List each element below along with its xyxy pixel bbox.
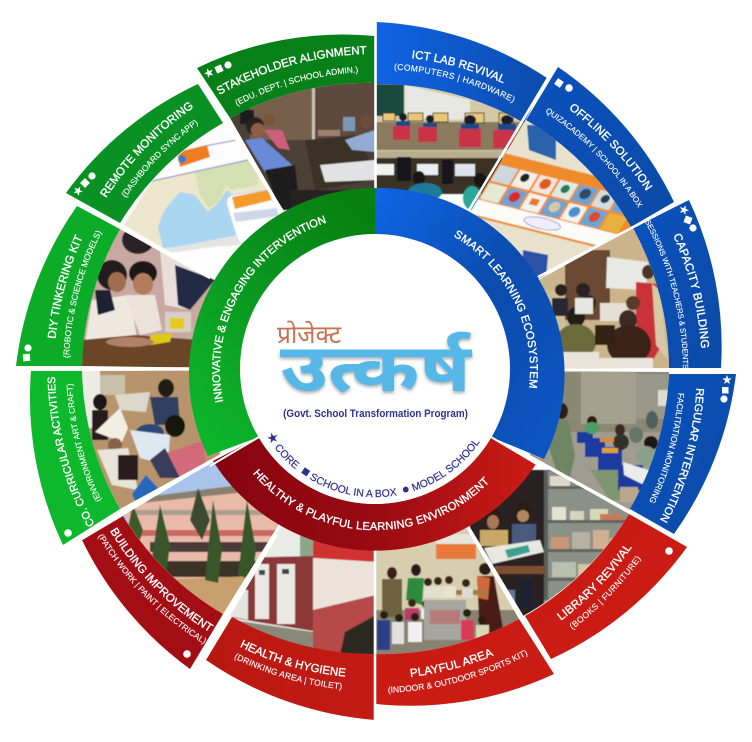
photo: group with sports kit	[376, 528, 519, 654]
title: STAKEHOLDER ALIGNMENT	[216, 46, 366, 94]
subtitle: (COMPUTERS | HARDWARE)	[394, 63, 514, 104]
logo: Project Utkarsh	[277, 321, 472, 420]
band	[630, 374, 736, 534]
subtitle: (DRINKING AREA | TOILET)	[234, 654, 342, 691]
icons: school in a box, model school	[23, 344, 32, 361]
icon: model school	[665, 547, 673, 555]
ring: Smart Learning Ecosystem	[375, 188, 565, 459]
band	[16, 206, 120, 366]
panel: Capacity Building	[539, 200, 722, 368]
band	[206, 617, 375, 720]
center: logo disc	[240, 234, 510, 504]
band	[30, 371, 120, 545]
band	[197, 34, 375, 118]
title: CO. CURRICULAR ACTIVITIES	[47, 377, 94, 526]
subtitle: (PATCH WORK | PAINT | ELECTRICAL)	[97, 534, 206, 645]
panel: Regular Intervention	[529, 371, 736, 534]
title: CAPACITY BUILDING	[674, 234, 710, 348]
subtitle: (DASHBOARD SYNC APP)	[122, 120, 198, 198]
icons: core, school in a box, model school	[71, 172, 96, 197]
band	[525, 514, 687, 659]
subtitle: SESSIONS WITH TEACHERS & STUDENTS	[645, 220, 688, 368]
photo: meeting	[225, 80, 380, 210]
band	[376, 619, 554, 706]
label: HEALTHY & PLAYFUL LEARNING ENVIRONMENT	[253, 468, 488, 530]
title: PLAYFUL AREA	[410, 649, 494, 678]
panel: Playful Area	[376, 528, 554, 706]
photo: toilets and drinking area	[230, 526, 374, 654]
logo word: utkarsh: उत्कर्ष	[280, 331, 472, 405]
panel: Building Improvement	[82, 440, 279, 669]
panel: Co. Curricular Activities	[30, 370, 221, 545]
legend: program types: ★ CORE ■ SCHOOL IN A BOX ● MODEL SCHOOL	[267, 432, 480, 498]
photo: children with paper craft	[82, 370, 221, 509]
panel: Remote Monitoring	[66, 84, 282, 253]
icon: model school	[64, 529, 72, 537]
photo: computer lab	[376, 84, 526, 210]
subtitle: (BOOKS | FURNITURE)	[570, 556, 642, 630]
subtitle: FACILITATION MONITORING	[650, 393, 684, 504]
icons: core, school in a box, model school	[203, 61, 232, 79]
ring: Innovative & Engaging Intervention	[188, 188, 375, 456]
band	[376, 22, 547, 123]
band	[633, 200, 722, 368]
photo: teacher session	[539, 228, 669, 368]
photo: poster	[472, 120, 631, 279]
photo: classroom	[530, 370, 675, 515]
band	[82, 516, 223, 669]
photo: dashboard map	[124, 139, 282, 253]
photo: children with kit	[82, 228, 214, 368]
logo tagline: (Govt. School Transformation Program)	[283, 407, 468, 420]
icons: core, school in a box, model school	[720, 375, 732, 403]
title: REGULAR INTERVENTION	[660, 388, 704, 524]
icons: school in a box, model school	[554, 78, 573, 92]
label: INNOVATIVE & ENGAGING INTERVENTION	[212, 215, 326, 403]
title: DIY TINKERING KIT	[48, 234, 82, 338]
logo word: project: प्रोजेक्ट	[277, 321, 342, 349]
subtitle: (EDU. DEPT. | SCHOOL ADMIN.)	[236, 66, 358, 106]
label: SMART LEARNING ECOSYSTEM	[454, 230, 538, 388]
subtitle: (INDOOR & OUTDOOR SPORTS KIT)	[388, 650, 528, 695]
title: OFFLINE SOLUTION	[570, 104, 653, 191]
band	[66, 84, 223, 223]
photo: school building	[123, 440, 279, 614]
title: ICT LAB REVIVAL	[412, 50, 504, 84]
title: LIBRARY REVIVAL	[556, 546, 632, 620]
photo: library shelves and students	[470, 470, 640, 620]
panel: Stakeholder Alignment	[197, 34, 374, 211]
title: HEALTH & HYGIENE	[240, 640, 346, 677]
panel: Library Revival	[469, 469, 687, 659]
panel: Health & Hygiene	[206, 526, 374, 720]
icons: core, school in a box, model school	[678, 204, 697, 232]
icon: model school	[183, 650, 191, 658]
title: REMOTE MONITORING	[100, 102, 193, 198]
subtitle: (ENVIRONMENT ART & CRAFT)	[66, 384, 102, 502]
ring: Healthy & Playful Learning Environment	[213, 438, 536, 551]
title: BUILDING IMPROVEMENT	[110, 527, 214, 631]
panel: DIY Tinkering Kit	[16, 206, 214, 368]
panel: ICT Lab Revival	[376, 22, 547, 211]
band	[526, 67, 674, 227]
subtitle: (ROBOTIC & SCIENCE MODELS)	[63, 230, 102, 358]
panel: Offline Solution	[472, 67, 674, 279]
subtitle: QUIZACADEMY | SCHOOL IN A BOX	[546, 108, 643, 208]
